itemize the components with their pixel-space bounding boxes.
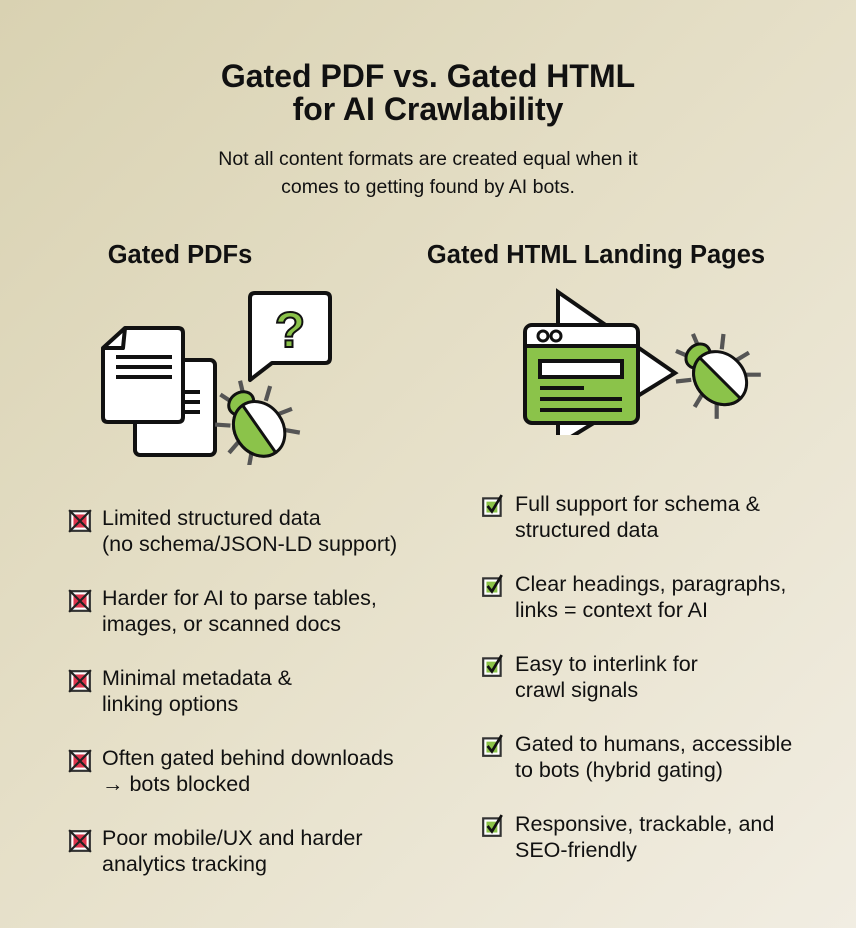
item 4: → bots blocked	[102, 772, 250, 796]
item 1	[68, 506, 397, 556]
title: for AI Crawlability	[293, 91, 563, 127]
item 4	[482, 732, 792, 782]
item 2: images, or scanned docs	[102, 612, 341, 636]
item 2	[68, 586, 377, 636]
item 1: structured data	[515, 518, 658, 542]
item 2: links = context for AI	[515, 598, 708, 622]
item 5	[482, 812, 774, 862]
subtitle: comes to getting found by AI bots.	[281, 176, 575, 198]
item 3	[68, 666, 292, 716]
subtitle	[218, 148, 638, 198]
item 4: to bots (hybrid gating)	[515, 758, 723, 782]
list: HTML pros	[482, 492, 792, 862]
item 3: crawl signals	[515, 678, 638, 702]
item 2: Clear headings, paragraphs,	[515, 572, 786, 596]
title	[221, 58, 635, 127]
item 3: linking options	[102, 692, 238, 716]
item 5: Responsive, trackable, and	[515, 812, 774, 836]
heading: gated PDFs: Gated PDFs	[108, 241, 252, 269]
item 4: Often gated behind downloads	[102, 746, 394, 770]
item 1: Limited structured data	[102, 506, 321, 530]
item 5: Poor mobile/UX and harder	[102, 826, 363, 850]
icon: HTML page with bug	[523, 288, 761, 435]
item 2: Harder for AI to parse tables,	[102, 586, 377, 610]
item 2	[482, 572, 786, 622]
subtitle: Not all content formats are created equal when it	[218, 148, 638, 170]
icon: PDF docs with bug	[101, 291, 332, 465]
item 1: Full support for schema &	[515, 492, 760, 516]
item 5: analytics tracking	[102, 852, 267, 876]
item 1	[482, 492, 760, 542]
item 3	[482, 652, 698, 702]
item 1: (no schema/JSON-LD support)	[102, 532, 397, 556]
list: PDF cons	[68, 506, 397, 876]
title: Gated PDF vs. Gated HTML	[221, 58, 635, 94]
item 4: Gated to humans, accessible	[515, 732, 792, 756]
item 5: SEO-friendly	[515, 838, 637, 862]
item 3: Minimal metadata &	[102, 666, 292, 690]
item 3: Easy to interlink for	[515, 652, 698, 676]
heading: gated HTML: Gated HTML Landing Pages	[427, 241, 765, 269]
icon: PDF docs with bug: ?	[275, 302, 305, 358]
item 5	[68, 826, 363, 876]
item 4	[68, 746, 394, 796]
